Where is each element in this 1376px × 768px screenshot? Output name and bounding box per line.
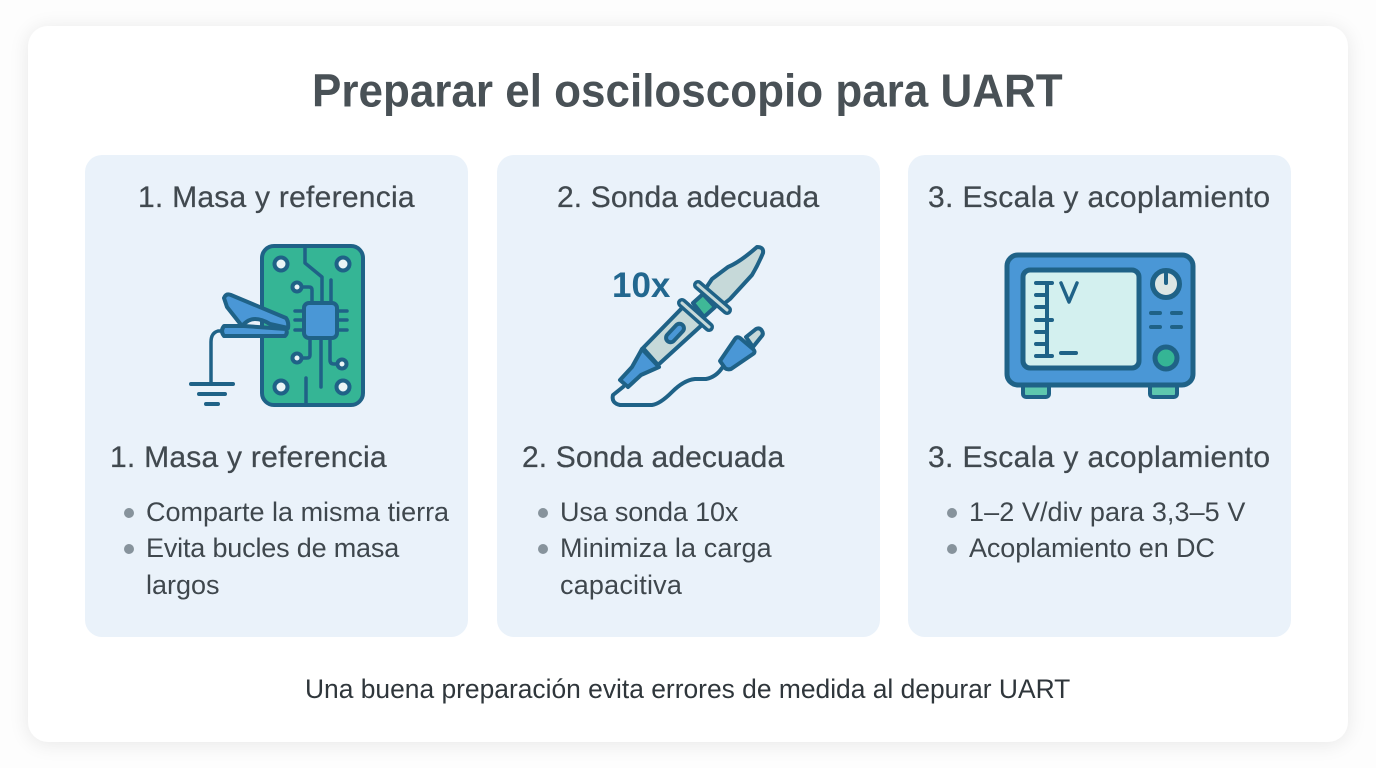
bullet list: sonda <box>538 497 772 600</box>
item 2: Acoplamiento en DC <box>969 533 1215 563</box>
bullet list: escala <box>947 497 1246 563</box>
bullet 2 <box>947 544 957 554</box>
heading: escala: 3. Escala y acoplamiento <box>928 181 1270 214</box>
item 1: Comparte la misma tierra <box>146 497 449 527</box>
bullet 1 <box>538 508 548 518</box>
bullet 2 <box>124 544 134 554</box>
icon: circuit board with ground clip <box>189 244 365 407</box>
item 2: Evita bucles de masa <box>146 533 399 563</box>
heading: masa: 1. Masa y referencia <box>138 181 415 214</box>
item 2: Minimiza la carga <box>560 533 772 563</box>
subheading: masa: 1. Masa y referencia <box>110 441 387 474</box>
icon: 10x probe <box>610 245 766 407</box>
item 2 continued: largos <box>146 570 220 600</box>
item 2 continued: capacitiva <box>560 570 682 600</box>
bullet 1 <box>947 508 957 518</box>
panel: masa y referencia <box>85 155 468 637</box>
bullet list: masa <box>124 497 449 600</box>
footer note: Una buena preparación evita errores de medida al depurar UART <box>305 674 1070 704</box>
item 1: Usa sonda 10x <box>560 497 738 527</box>
panel: sonda adecuada <box>497 155 880 637</box>
subheading: escala: 3. Escala y acoplamiento <box>928 441 1270 474</box>
title: Preparar el osciloscopio para UART <box>312 66 1063 117</box>
bullet 1 <box>124 508 134 518</box>
icon: oscilloscope <box>1004 252 1196 399</box>
item 1: 1–2 V/div para 3,3–5 V <box>969 497 1245 527</box>
bullet 2 <box>538 544 548 554</box>
heading: sonda: 2. Sonda adecuada <box>557 181 819 214</box>
icon: 10x probe: 10x <box>612 266 671 305</box>
panel: escala y acoplamiento <box>908 155 1291 637</box>
subheading: sonda: 2. Sonda adecuada <box>522 441 784 474</box>
